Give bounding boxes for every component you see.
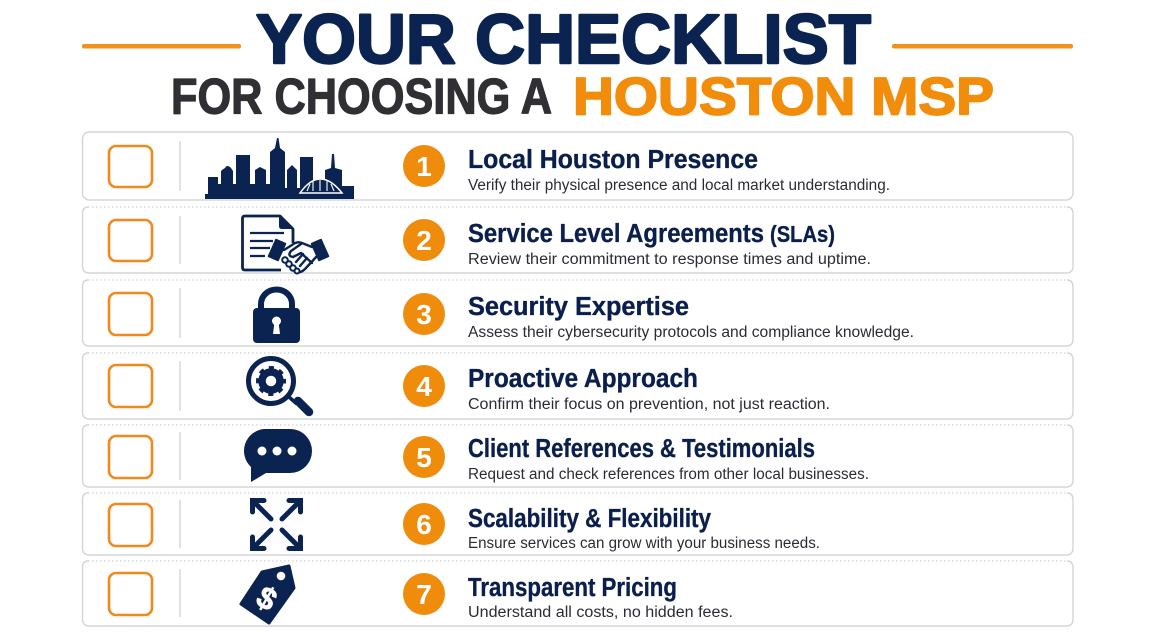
number badge 3: 3 xyxy=(416,299,432,330)
subtitle: for choosing a: FOR CHOOSING A xyxy=(171,68,552,124)
icon: padlock xyxy=(253,290,300,343)
number badge 7: 7 xyxy=(416,579,432,610)
description 4: Confirm their focus on prevention, not just reaction. xyxy=(468,396,830,413)
panel: item 6 scalability and flexibility xyxy=(82,493,1073,555)
right orange rule xyxy=(892,44,1073,48)
number badge 2: 2 xyxy=(416,225,432,256)
heading 4: Proactive Approach xyxy=(468,365,698,393)
checkbox 1 xyxy=(109,146,152,187)
description 6: Ensure services can grow with your business needs. xyxy=(468,535,820,552)
panel: item 4 proactive approach xyxy=(82,353,1073,419)
checkbox 3 xyxy=(109,293,152,335)
number badge 5 xyxy=(403,436,445,478)
description 5: Request and check references from other local businesses. xyxy=(468,466,869,483)
checkbox 5 xyxy=(109,436,152,478)
left orange rule xyxy=(82,44,241,48)
heading 2: Service Level Agreements xyxy=(468,220,764,248)
panel: item 5 client references and testimonials xyxy=(82,425,1073,487)
heading 7: Transparent Pricing xyxy=(468,574,677,602)
number badge 5: 5 xyxy=(416,442,432,473)
icon: houston skyline xyxy=(205,138,354,199)
checkbox 6 xyxy=(109,504,152,546)
panel: item 1 local houston presence xyxy=(82,132,1073,200)
number badge 4: 4 xyxy=(416,371,432,402)
icon: speech bubble xyxy=(244,429,312,482)
icon: magnifier with gear xyxy=(248,358,309,412)
panel: item 3 security expertise xyxy=(82,280,1073,346)
heading 5: Client References & Testimonials xyxy=(468,435,815,463)
icon: four expanding arrows xyxy=(252,500,300,548)
number badge 3 xyxy=(403,293,445,335)
number badge 2 xyxy=(403,219,445,261)
description 1: Verify their physical presence and local market understanding. xyxy=(468,177,890,194)
description 2: Review their commitment to response times and uptime. xyxy=(468,251,871,268)
title xyxy=(82,0,1073,126)
heading 6: Scalability & Flexibility xyxy=(468,505,712,533)
heading 3: Security Expertise xyxy=(468,293,689,321)
number badge 7 xyxy=(403,573,445,615)
number badge 4 xyxy=(403,365,445,407)
number badge 6: 6 xyxy=(416,509,432,540)
heading 1: Local Houston Presence xyxy=(468,146,758,174)
heading 2: (SLAs) xyxy=(770,221,835,247)
number badge 1: 1 xyxy=(416,151,432,182)
icon: price tag: $ xyxy=(251,579,283,618)
number badge 6 xyxy=(403,503,445,545)
panel: item 2 service level agreements xyxy=(82,207,1073,274)
description 7: Understand all costs, no hidden fees. xyxy=(468,604,733,621)
icon: price tag xyxy=(241,566,294,623)
icon: contract and handshake xyxy=(242,215,330,274)
checkbox 2 xyxy=(109,220,152,261)
checkbox 7 xyxy=(109,573,152,615)
checkbox 4 xyxy=(109,365,152,407)
panel: item 7 transparent pricing xyxy=(82,561,1073,626)
description 3: Assess their cybersecurity protocols and compliance knowledge. xyxy=(468,324,914,341)
subtitle: houston msp: HOUSTON MSP xyxy=(573,68,994,126)
number badge 1 xyxy=(403,145,445,187)
title line: your checklist: YOUR CHECKLIST xyxy=(256,0,871,78)
